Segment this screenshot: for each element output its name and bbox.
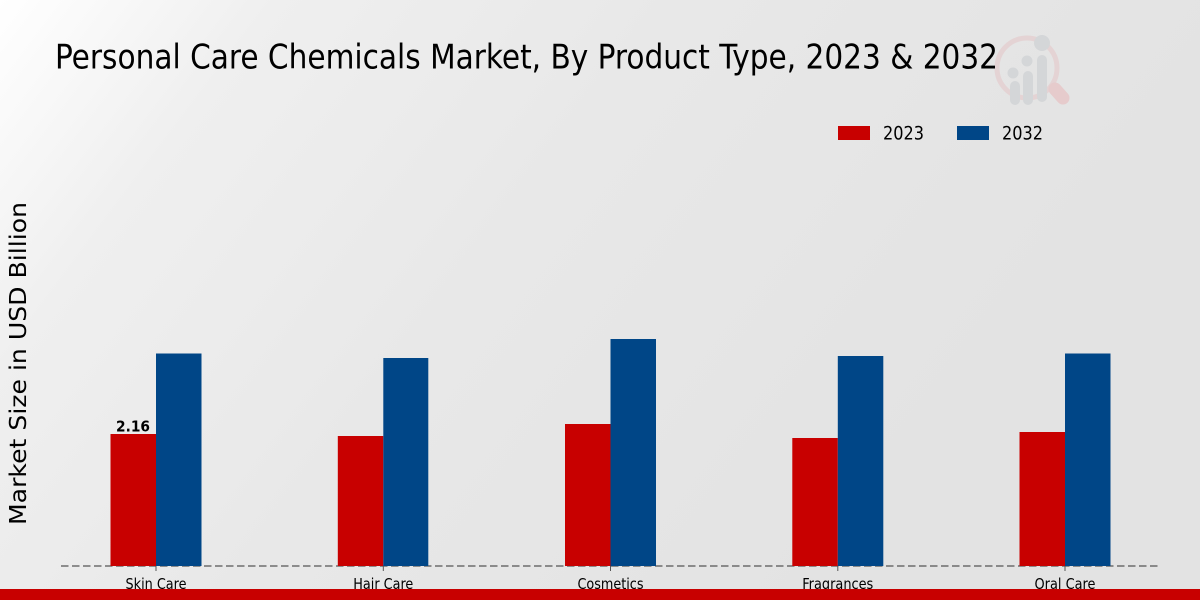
- bar group: Hair Care: [338, 358, 428, 593]
- bar group: Fragrances: Fragrances: [802, 575, 873, 593]
- bar chart: [61, 339, 1160, 593]
- legend item: 2032: [957, 122, 1043, 144]
- legend item: 2032: 2032: [1002, 122, 1043, 144]
- bar group: Cosmetics: Cosmetics: [578, 575, 644, 593]
- icon: magnifier logo watermark: [997, 35, 1063, 105]
- bar group: Skin Care: [110, 354, 202, 593]
- bar group: Fragrances: [792, 356, 883, 593]
- legend item: 2023: 2023: [883, 122, 924, 144]
- value label: 2.16: [116, 418, 150, 436]
- bar group: Hair Care: Hair Care: [353, 575, 413, 593]
- legend: [838, 122, 1043, 144]
- title: Personal Care Chemicals Market, By Product Type, 2023 & 2032: [55, 38, 998, 78]
- legend item: 2023: [838, 122, 924, 144]
- bar group: Oral Care: [1020, 354, 1110, 593]
- y axis label: Market Size in USD Billion: [6, 202, 32, 525]
- bar group: Skin Care: Skin Care: [126, 575, 186, 593]
- baseline axis: [61, 565, 1160, 567]
- bar group: Oral Care: Oral Care: [1034, 575, 1096, 593]
- bar group: Cosmetics: [565, 339, 656, 593]
- bottom red band: [0, 589, 1200, 600]
